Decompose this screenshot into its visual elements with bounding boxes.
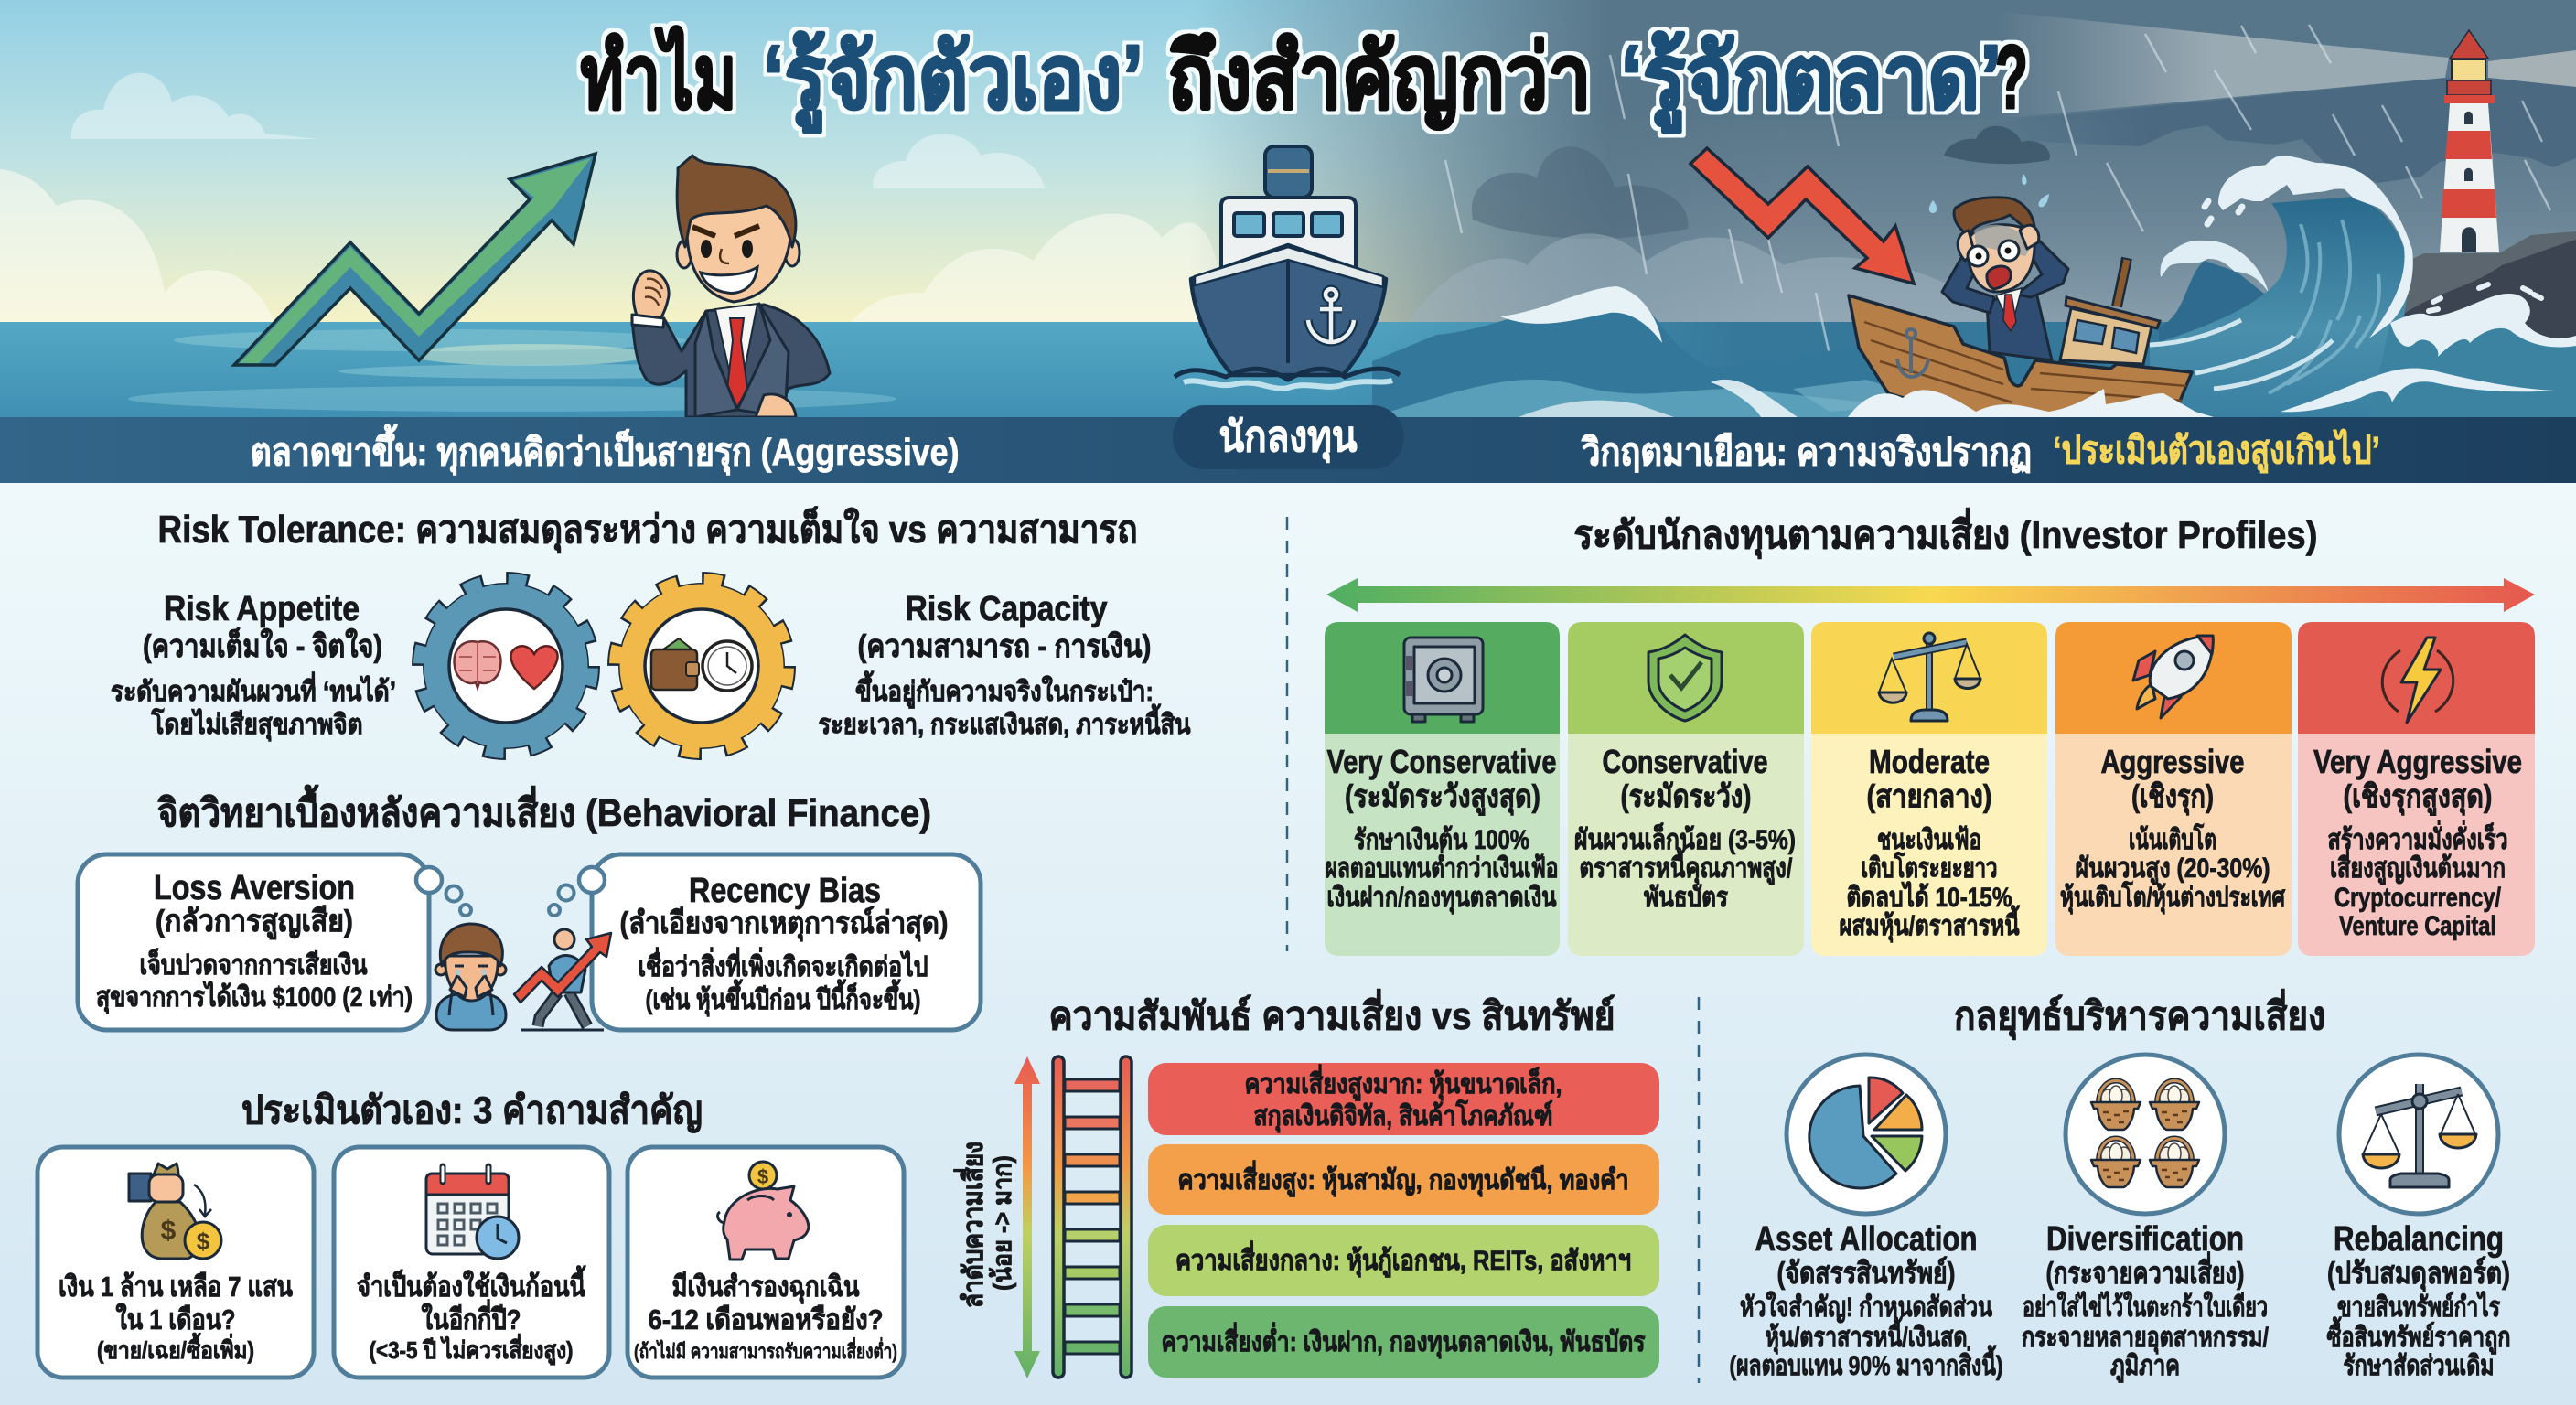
profile: conservative: (ระมัดระวัง)	[1621, 779, 1751, 814]
raised fist	[632, 271, 669, 327]
card: question 3: มีเงินสำรองฉุกเฉิน	[671, 1271, 860, 1304]
card: question 1: เงิน 1 ล้าน เหลือ 7 แสน	[59, 1271, 293, 1303]
profile: conservative	[1568, 622, 1804, 956]
vertical axis label: (น้อย -> มาก)	[988, 1155, 1016, 1291]
strategy: diversification: กระจายหลายอุตสาหกรรม/	[2022, 1323, 2270, 1355]
profile: moderate: (สายกลาง)	[1866, 779, 1992, 814]
card: recency bias: (ลำเอียงจากเหตุการณ์ล่าสุด)	[620, 906, 948, 942]
icon: tilted balance scale	[2363, 1084, 2476, 1187]
icon: lightning bolt	[2382, 638, 2453, 723]
bar: very high risk: ความเสี่ยงสูงมาก: หุ้นขนาดเล็ก,	[1244, 1064, 1562, 1101]
panel: behavioral finance	[78, 784, 981, 1030]
hero banner	[0, 0, 2576, 483]
profile: very conservative: Very Conservative	[1326, 743, 1557, 780]
icon: balance scale	[1879, 633, 1980, 721]
card: question 2: จำเป็นต้องใช้เงินก้อนนี้	[357, 1265, 586, 1303]
bar: high risk: ความเสี่ยงสูง: หุ้นสามัญ, กองทุนดัชนี, ทองคำ	[1178, 1160, 1628, 1197]
rising green arrow	[234, 154, 596, 365]
panel: risk versus assets	[953, 989, 1659, 1378]
strategy: asset allocation: Asset Allocation	[1755, 1220, 1978, 1259]
businessman confident	[632, 156, 830, 417]
icon: money bag	[129, 1164, 221, 1259]
profile: aggressive	[2055, 622, 2292, 956]
card: question 1: ใน 1 เดือน?	[115, 1303, 236, 1335]
storm clouds and light beam	[1409, 11, 2576, 375]
ladder	[1053, 1056, 1132, 1378]
profile: aggressive: Aggressive	[2100, 743, 2245, 780]
strategy: asset allocation: หุ้น/ตราสารหนี้/เงินสด	[1766, 1316, 1967, 1355]
strategy: diversification: (กระจายความเสี่ยง)	[2045, 1251, 2245, 1290]
profile: very aggressive: Venture Capital	[2339, 911, 2496, 941]
main title: ถึงสำคัญกว่า	[1167, 27, 1592, 131]
strategy: diversification: ภูมิภาค	[2110, 1351, 2180, 1383]
icon: blue gear with brain and heart	[422, 582, 590, 750]
caption: crisis	[1581, 428, 2380, 474]
profile: aggressive: หุ้นเติบโต/หุ้นต่างประเทศ	[2060, 880, 2286, 915]
main title: ‘รู้จักตลาด’	[1621, 27, 2002, 134]
caption: crisis: วิกฤตมาเยือน: ความจริงปรากฏ	[1581, 431, 2032, 473]
icon: gold gear with wallet and clock	[617, 582, 786, 750]
profile: aggressive: เน้นเติบโต	[2129, 822, 2216, 855]
profile: conservative: Conservative	[1603, 743, 1767, 780]
rocks	[2378, 231, 2576, 343]
vertical risk arrow	[1014, 1056, 1040, 1378]
risk capacity text: ขึ้นอยู่กับความจริงในกระเป๋า:	[855, 670, 1154, 709]
profile: conservative: พันธบัตร	[1644, 883, 1728, 913]
profile: conservative: ผันผวนเล็กน้อย (3-5%)	[1574, 822, 1796, 855]
icon: piggy bank	[718, 1162, 809, 1260]
strategy: diversification	[2022, 1055, 2270, 1383]
profile: very conservative	[1325, 622, 1560, 956]
strategy: asset allocation: หัวใจสำคัญ! กำหนดสัดส่วน	[1740, 1291, 1992, 1324]
card: question 1	[38, 1147, 314, 1378]
profile: very aggressive: Cryptocurrency/	[2334, 883, 2502, 913]
icon: pie chart	[1809, 1078, 1922, 1188]
card: question 3	[628, 1147, 904, 1378]
profile: moderate: Moderate	[1869, 743, 1990, 780]
risk capacity text: ระยะเวลา, กระแสเงินสด, ภาระหนี้สิน	[818, 703, 1191, 740]
investor pill	[1173, 405, 1404, 469]
heading: risk tolerance: Risk Tolerance: ความสมดุลระหว่าง ความเต็มใจ vs ความสามารถ	[157, 506, 1138, 553]
icon: crying investor	[435, 924, 506, 1030]
card: question 2	[334, 1147, 609, 1378]
profile: very aggressive: เสี่ยงสูญเงินต้นมาก	[2330, 848, 2506, 885]
bar: very high risk: สกุลเงินดิจิทัล, สินค้าโภคภัณฑ์	[1253, 1099, 1553, 1133]
strategy: rebalancing: ขายสินทรัพย์กำไร	[2337, 1291, 2500, 1323]
storm sea waves	[1372, 286, 2576, 417]
card: question 2: (<3-5 ปี ไม่ควรเสี่ยงสูง)	[370, 1333, 573, 1366]
bar: medium risk: ความเสี่ยงกลาง: หุ้นกู้เอกชน, REITs, อสังหาฯ	[1175, 1240, 1631, 1278]
caption band	[0, 417, 2576, 483]
card: loss aversion: (กลัวการสูญเสีย)	[156, 904, 353, 940]
heading: investor profiles: ระดับนักลงทุนตามความเสี่ยง (Investor Profiles)	[1573, 508, 2318, 559]
vertical axis label: ลำดับความเสี่ยง	[953, 1142, 989, 1308]
investor pill: นักลงทุน	[1218, 413, 1358, 463]
caption: bull market: ตลาดขาขึ้น: ทุกคนคิดว่าเป็นสายรุก (Aggressive)	[251, 424, 959, 476]
panel: risk management strategies	[1729, 989, 2510, 1383]
main title	[580, 26, 2028, 134]
icon: four egg baskets	[2091, 1081, 2199, 1187]
strategy: asset allocation: (จัดสรรสินทรัพย์)	[1776, 1256, 1956, 1290]
card: loss aversion: Loss Aversion	[154, 869, 355, 907]
icon: piggy bank: $	[757, 1165, 768, 1188]
profile: very conservative: เงินฝาก/กองทุนตลาดเงิน	[1326, 883, 1557, 915]
icon: money bag: $	[197, 1228, 210, 1255]
strategy: rebalancing: ซื้อสินทรัพย์ราคาถูก	[2327, 1316, 2510, 1355]
strategy: rebalancing: Rebalancing	[2334, 1220, 2504, 1259]
profile: very aggressive: Very Aggressive	[2313, 743, 2522, 780]
icon: calendar with clock	[426, 1166, 519, 1259]
boat with panicked investor	[1848, 174, 2214, 417]
strategy: rebalancing: (ปรับสมดุลพอร์ต)	[2327, 1256, 2510, 1292]
heading: behavioral finance: จิตวิทยาเบื้องหลังความเสี่ยง (Behavioral Finance)	[157, 784, 931, 834]
card: question 3: 6-12 เดือนพอหรือยัง?	[648, 1303, 884, 1335]
big crashing waves	[2150, 156, 2576, 417]
profile: very aggressive: สร้างความมั่งคั่งเร็ว	[2327, 820, 2508, 855]
card: recency bias: เชื่อว่าสิ่งที่เพิ่งเกิดจะเกิดต่อไป	[639, 947, 928, 982]
card: question 2: ในอีกกี่ปี?	[421, 1299, 521, 1335]
profile: very conservative: (ระมัดระวังสูงสุด)	[1345, 779, 1540, 816]
profile: very conservative: รักษาเงินต้น 100%	[1354, 825, 1530, 855]
profile: very aggressive: (เชิงรุกสูงสุด)	[2344, 779, 2492, 816]
icon: money bag: $	[161, 1216, 177, 1246]
bar: very high risk	[1148, 1063, 1659, 1135]
strategy: asset allocation	[1729, 1055, 2003, 1381]
risk appetite text: (ความเต็มใจ - จิตใจ)	[143, 627, 382, 664]
investor ship	[1175, 146, 1400, 389]
falling red arrow	[1690, 148, 1914, 284]
profile: moderate	[1811, 622, 2047, 956]
card: recency bias: (เช่น หุ้นขึ้นปีก่อน ปีนี้ก็จะขึ้น)	[646, 979, 920, 1017]
bar: low risk: ความเสี่ยงต่ำ: เงินฝาก, กองทุนตลาดเงิน, พันธบัตร	[1162, 1322, 1645, 1359]
profile: moderate: เติบโตระยะยาว	[1861, 851, 1998, 884]
risk appetite text: โดยไม่เสียสุขภาพจิต	[151, 707, 362, 742]
bar: medium risk	[1148, 1225, 1659, 1296]
strategy: asset allocation: (ผลตอบแทน 90% มาจากสิ่งนี้)	[1729, 1345, 2003, 1381]
strategy: rebalancing	[2327, 1055, 2510, 1381]
strategy: rebalancing: รักษาสัดส่วนเดิม	[2344, 1351, 2494, 1381]
card: recency bias	[549, 854, 981, 1030]
main title: ?	[1995, 27, 2028, 127]
main title: ‘รู้จักตัวเอง’	[763, 27, 1143, 134]
main title: ทำไม	[580, 26, 737, 127]
card: loss aversion: สุขจากการได้เงิน $1000 (2 เท่า)	[96, 981, 413, 1014]
heading: strategies: กลยุทธ์บริหารความเสี่ยง	[1954, 989, 2325, 1040]
panel: self assessment	[38, 1089, 904, 1378]
profile: moderate: ผสมหุ้น/ตราสารหนี้	[1839, 905, 2020, 943]
heading: three questions: ประเมินตัวเอง: 3 คำถามสำคัญ	[242, 1089, 703, 1133]
risk capacity text	[818, 590, 1191, 740]
risk appetite text	[111, 590, 396, 742]
card: recency bias: Recency Bias	[689, 872, 881, 910]
icon: safe	[1404, 638, 1483, 722]
profile: moderate: ชนะเงินเฟ้อ	[1877, 825, 1981, 855]
icon: man carrying rising arrow	[514, 929, 611, 1030]
profile: moderate: ติดลบได้ 10-15%	[1846, 881, 2012, 913]
profile: aggressive: (เชิงรุก)	[2131, 779, 2214, 816]
profile: aggressive: ผันผวนสูง (20-30%)	[2075, 853, 2270, 885]
icon: rocket	[2133, 636, 2213, 718]
vertical axis label	[953, 1142, 1016, 1308]
hero sky and sea	[0, 0, 2576, 423]
profile: conservative: ตราสารหนี้คุณภาพสูง/	[1579, 847, 1793, 885]
heading: risk vs assets: ความสัมพันธ์ ความเสี่ยง vs สินทรัพย์	[1048, 989, 1615, 1037]
card: question 3: (ถ้าไม่มี ความสามารถรับความเสี่ยงต่ำ)	[634, 1336, 897, 1363]
profile: very conservative: ผลตอบแทนต่ำกว่าเงินเฟ้อ	[1325, 848, 1559, 884]
risk capacity text: Risk Capacity	[906, 590, 1107, 628]
risk capacity text: (ความสามารถ - การเงิน)	[858, 629, 1151, 664]
card: loss aversion	[78, 854, 471, 1030]
card: loss aversion: เจ็บปวดจากการเสียเงิน	[139, 948, 368, 981]
risk appetite text: Risk Appetite	[164, 590, 360, 628]
icon: shield	[1648, 635, 1722, 721]
card: question 1: (ขาย/เฉย/ซื้อเพิ่ม)	[97, 1332, 254, 1364]
profile: very aggressive	[2298, 622, 2535, 956]
risk appetite text: ระดับความผันผวนที่ ‘ทนได้’	[111, 671, 396, 707]
strategy: diversification: Diversification	[2046, 1220, 2244, 1259]
risk spectrum arrow	[1326, 578, 2535, 612]
lighthouse	[2440, 30, 2499, 252]
panel: risk tolerance	[111, 506, 1191, 750]
strategy: diversification: อย่าใส่ไข่ไว้ในตะกร้าใบเดียว	[2023, 1291, 2268, 1323]
caption: crisis: ‘ประเมินตัวเองสูงเกินไป’	[2053, 428, 2380, 474]
bar: high risk	[1148, 1144, 1659, 1215]
bar: low risk	[1148, 1306, 1659, 1378]
panel: investor profiles	[1325, 508, 2535, 956]
